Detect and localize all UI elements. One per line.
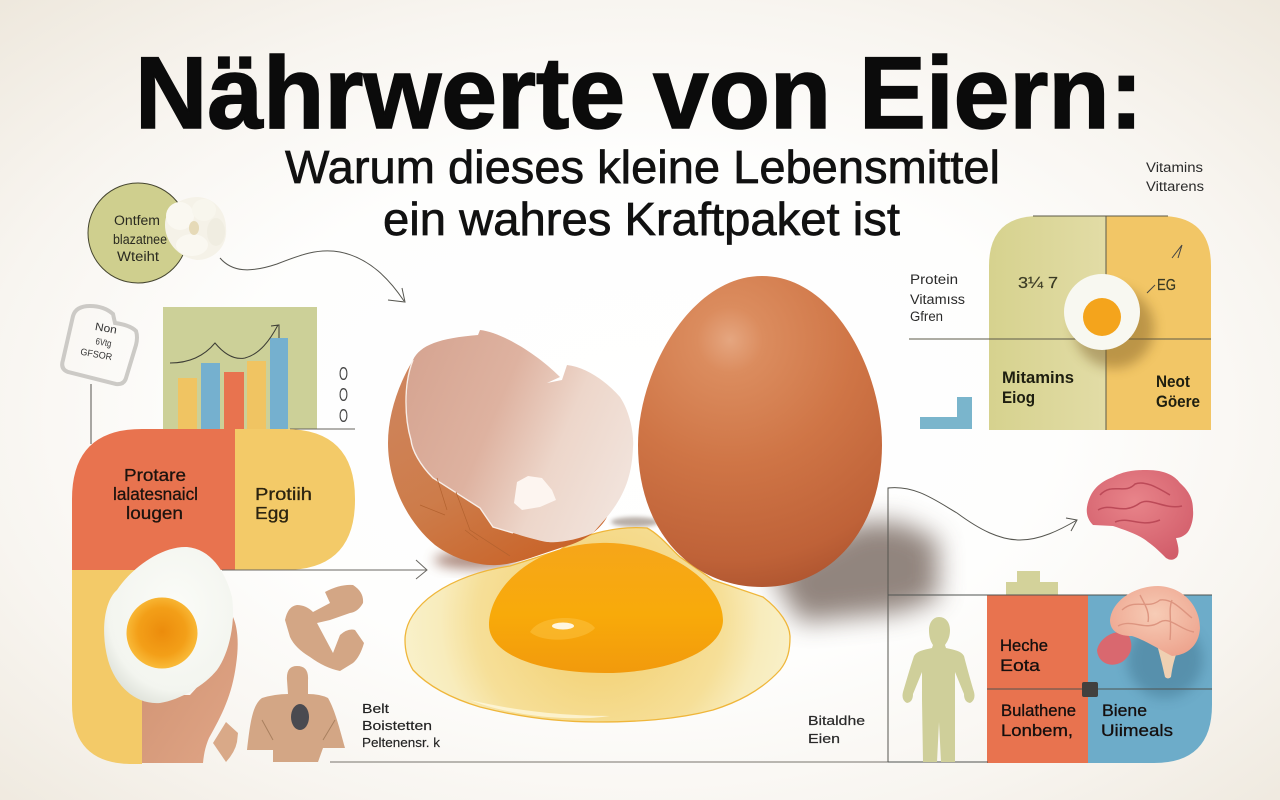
panel text: Protare: Protare: [124, 465, 186, 485]
chart axis zeros: O: [339, 364, 348, 384]
tag icon: GFSOR: [79, 347, 113, 363]
panel: vitamins quadrants top right: Neot: [1156, 373, 1190, 391]
text: bottom-left caption: Belt: [362, 701, 389, 716]
icon: torso with hands: [247, 666, 345, 762]
panel text: Protare: lalatesnaicl: [113, 484, 198, 504]
top-left callout: green circle with egg white: Ontfem: [114, 213, 160, 228]
panel labels: 3¼ 7: [1018, 275, 1058, 292]
panel text: Protein Egg: Egg: [255, 503, 289, 523]
text: bottom-left caption: [362, 701, 441, 750]
text: side labels: Vitamıss: [910, 292, 965, 307]
icon: pink brain: [1097, 586, 1200, 678]
top-left callout: green circle with egg white: Wteiht: [117, 249, 159, 264]
arrow: callout to egg: [220, 251, 405, 302]
yolk: [489, 543, 723, 673]
panel labels: Lonbem,: [1001, 722, 1073, 740]
panel labels: Bulathene: [1001, 702, 1076, 720]
tag icon: [62, 306, 137, 384]
illustration: hand holding boiled egg: [104, 547, 238, 763]
arrow: panel to yolk: [222, 560, 427, 579]
subtitle: ein wahres Kraftpaket ist: [383, 193, 900, 245]
egg white spill: [405, 528, 790, 722]
text: top-right vitamins labels: Vitamins: [1146, 160, 1203, 175]
text: bottom-left caption: Boistetten: [362, 718, 432, 733]
panel: vitamins quadrants top right: Eiog: [1002, 389, 1035, 407]
top-left callout: green circle with egg white: blazatnee: [113, 232, 167, 247]
text: side labels: Gfren: [910, 309, 943, 324]
text: caption near figure: Bitaldhe: [808, 713, 865, 728]
text: side labels: Protein: [910, 272, 958, 287]
chart line and arrow to brain: [888, 488, 1077, 762]
text: bottom-left caption: Peltenensr. k: [362, 735, 441, 750]
whole brown egg: [638, 276, 882, 587]
panel text: Protare: [113, 465, 198, 523]
connector lines: tag to panel: [90, 384, 92, 444]
shadow of egg: [434, 517, 938, 622]
panel labels: [1000, 637, 1173, 740]
text: side labels: [910, 272, 965, 324]
panel labels: EG: [1157, 277, 1176, 294]
panel: protein quadrants left: [72, 429, 355, 764]
panel: vitamins quadrants top right: [909, 216, 1211, 430]
title: Nährwerte von Eiern:: [135, 36, 1143, 150]
icon: small blue steps: [920, 397, 972, 429]
tag icon: Non: [94, 321, 118, 337]
panel: vitamins quadrants top right: Mitamins: [1002, 369, 1074, 387]
top-left callout: green circle with egg white: [88, 183, 226, 283]
panel labels: Uiimeals: [1101, 722, 1173, 740]
chart axis zeros: [339, 364, 348, 426]
broken shell: [388, 330, 633, 565]
panel: benefits quadrants bottom right: [888, 571, 1212, 763]
panel text: Protare: lougen: [126, 503, 183, 523]
icon: human silhouette: [902, 617, 974, 762]
panel labels: Heche: [1000, 637, 1048, 655]
text: top-right vitamins labels: [1146, 160, 1204, 194]
icon: small tab above panel: [1006, 571, 1058, 595]
tag icon: 6Vtg: [95, 336, 112, 350]
text: top-right vitamins labels: Vittarens: [1146, 179, 1204, 194]
panel text: Protein Egg: Protiih: [255, 484, 312, 504]
icon: red brain: [1087, 470, 1193, 560]
panel text: Protein Egg: [255, 484, 312, 523]
icon: boiled egg slice: [1064, 274, 1154, 368]
chart axis zeros: O: [339, 385, 348, 405]
baseline rule: [330, 761, 988, 763]
text: caption near figure: Eien: [808, 731, 840, 746]
subtitle: [285, 141, 1000, 245]
chart axis zeros: O: [339, 406, 348, 426]
bar chart: [163, 307, 355, 429]
panel labels: [1018, 275, 1176, 294]
panel: vitamins quadrants top right: Göere: [1156, 393, 1200, 411]
subtitle: Warum dieses kleine Lebensmittel: [285, 141, 1000, 193]
panel labels: Eota: [1000, 657, 1041, 675]
icon: flexed arm: [285, 585, 364, 671]
icon: egg white cluster: [165, 197, 226, 260]
text: caption near figure: [808, 713, 865, 746]
panel labels: Biene: [1102, 702, 1147, 720]
